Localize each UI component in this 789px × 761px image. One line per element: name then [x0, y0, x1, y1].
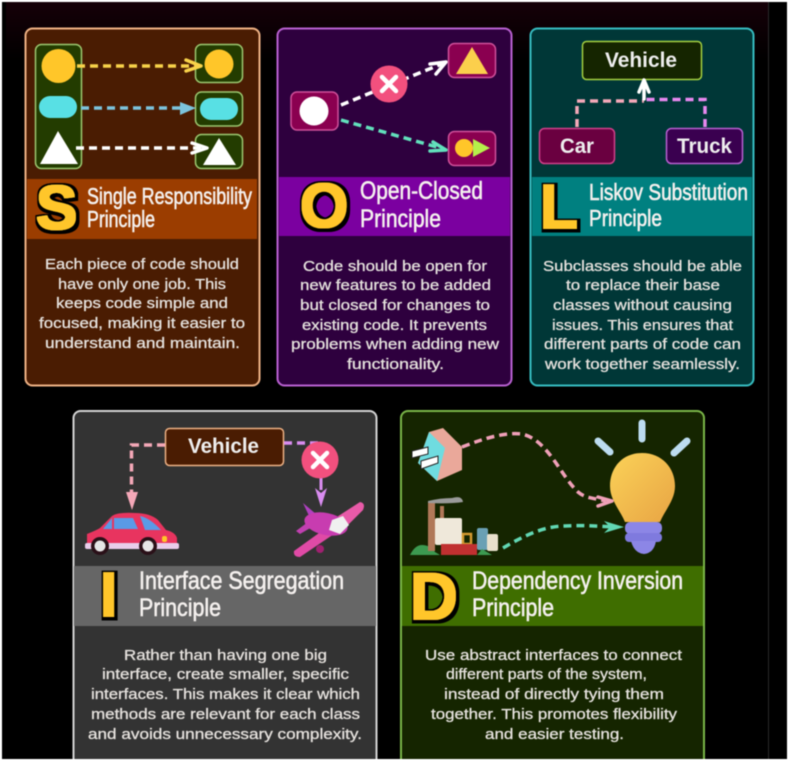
text block: O description: Code should be open for	[303, 258, 487, 275]
heading banner: D	[402, 559, 703, 633]
arrow: plug to bulb	[462, 434, 612, 506]
heading banner: S: Single Responsibility	[87, 183, 252, 209]
heading banner: D: D	[410, 559, 458, 633]
text block: S description: have only one job. This	[58, 276, 226, 293]
text block: O description: functionality.	[347, 356, 444, 373]
heading banner: O: O	[300, 172, 348, 241]
text block: L description	[543, 258, 742, 373]
text block: O description: problems when adding new	[291, 336, 499, 353]
icon: car	[85, 513, 179, 555]
heading banner: L: Liskov Substitution	[589, 179, 748, 205]
heading banner: O: Principle	[360, 205, 441, 233]
text block: S description: focused, making it easier to	[39, 315, 245, 332]
heading banner: L	[532, 173, 752, 242]
text block: D description: different parts of the system,	[446, 666, 647, 683]
heading banner: S: Principle	[87, 206, 155, 232]
text block: D description: instead of directly tying them	[444, 686, 664, 703]
heading banner: D: Principle	[472, 594, 554, 622]
text block: D description	[425, 647, 683, 743]
text block: L description: different parts of code can	[544, 336, 741, 353]
panel: dependency inversion	[401, 411, 704, 759]
heading banner: S: S	[36, 174, 77, 243]
text block: O description	[291, 258, 499, 373]
text block: L description: work together seamlessly.	[544, 356, 740, 373]
text block: O description: new features to be added	[300, 277, 491, 294]
icon: factory	[410, 497, 498, 555]
heading banner: O	[279, 172, 510, 241]
text block: S description: keeps code simple and	[56, 295, 228, 312]
icon: class hierarchy	[540, 42, 742, 164]
heading banner: I: I	[100, 561, 117, 630]
arrow: factory to bulb	[503, 521, 624, 548]
heading banner: I: Principle	[139, 594, 221, 622]
text block: O description: existing code. It prevents	[302, 317, 487, 334]
text block: I description: methods are relevant for each class	[91, 706, 360, 723]
text block: I description	[88, 647, 362, 743]
text block: O description: but closed for changes to	[300, 297, 490, 314]
icon: plug	[412, 428, 462, 481]
text block: D description: Use abstract interfaces to connect	[425, 647, 683, 664]
text block: I description: interfaces. This makes it clear which	[91, 686, 360, 703]
heading banner: L: L	[540, 173, 578, 242]
panel: liskov substitution	[530, 28, 754, 386]
text block: S description: understand and maintain.	[45, 335, 240, 352]
icon: vehicle interface diagram: Vehicle	[188, 435, 259, 458]
text block: I description: and avoids unnecessary complexity.	[88, 726, 362, 743]
text block: L description: Subclasses should be able	[543, 258, 742, 275]
panel: open-closed	[278, 28, 512, 386]
text block: L description: issues. This ensures that	[552, 317, 734, 334]
text block: D description: together. This promotes flexibility	[431, 706, 678, 723]
panel: single responsibility	[26, 28, 260, 386]
text block: D description: and easier testing.	[485, 726, 624, 743]
text block: I description: interface, create smaller, specific	[102, 666, 350, 683]
text block: S description	[39, 256, 245, 352]
icon: class hierarchy: Vehicle	[605, 49, 677, 72]
heading banner: L: Principle	[589, 205, 662, 231]
heading banner: D: Dependency Inversion	[472, 567, 683, 595]
heading banner: O: Open-Closed	[360, 177, 483, 205]
icon: class hierarchy: Car	[560, 135, 594, 158]
heading banner: I: Interface Segregation	[139, 567, 344, 595]
panel: interface segregation	[74, 411, 376, 759]
icon: vehicle interface diagram	[126, 428, 338, 510]
text block: S description: Each piece of code should	[45, 256, 239, 273]
icon: class hierarchy: Truck	[677, 135, 732, 158]
text block: I description: Rather than having one big	[124, 647, 327, 664]
icon: classes diagram	[36, 44, 242, 168]
icon: extension diagram	[291, 44, 496, 166]
heading banner: I	[74, 561, 376, 630]
heading banner: S	[27, 174, 257, 243]
text block: L description: classes without causing	[553, 297, 732, 314]
text block: L description: to replace their base	[566, 277, 720, 294]
icon: plane	[294, 502, 364, 557]
icon: light bulb	[598, 423, 687, 554]
